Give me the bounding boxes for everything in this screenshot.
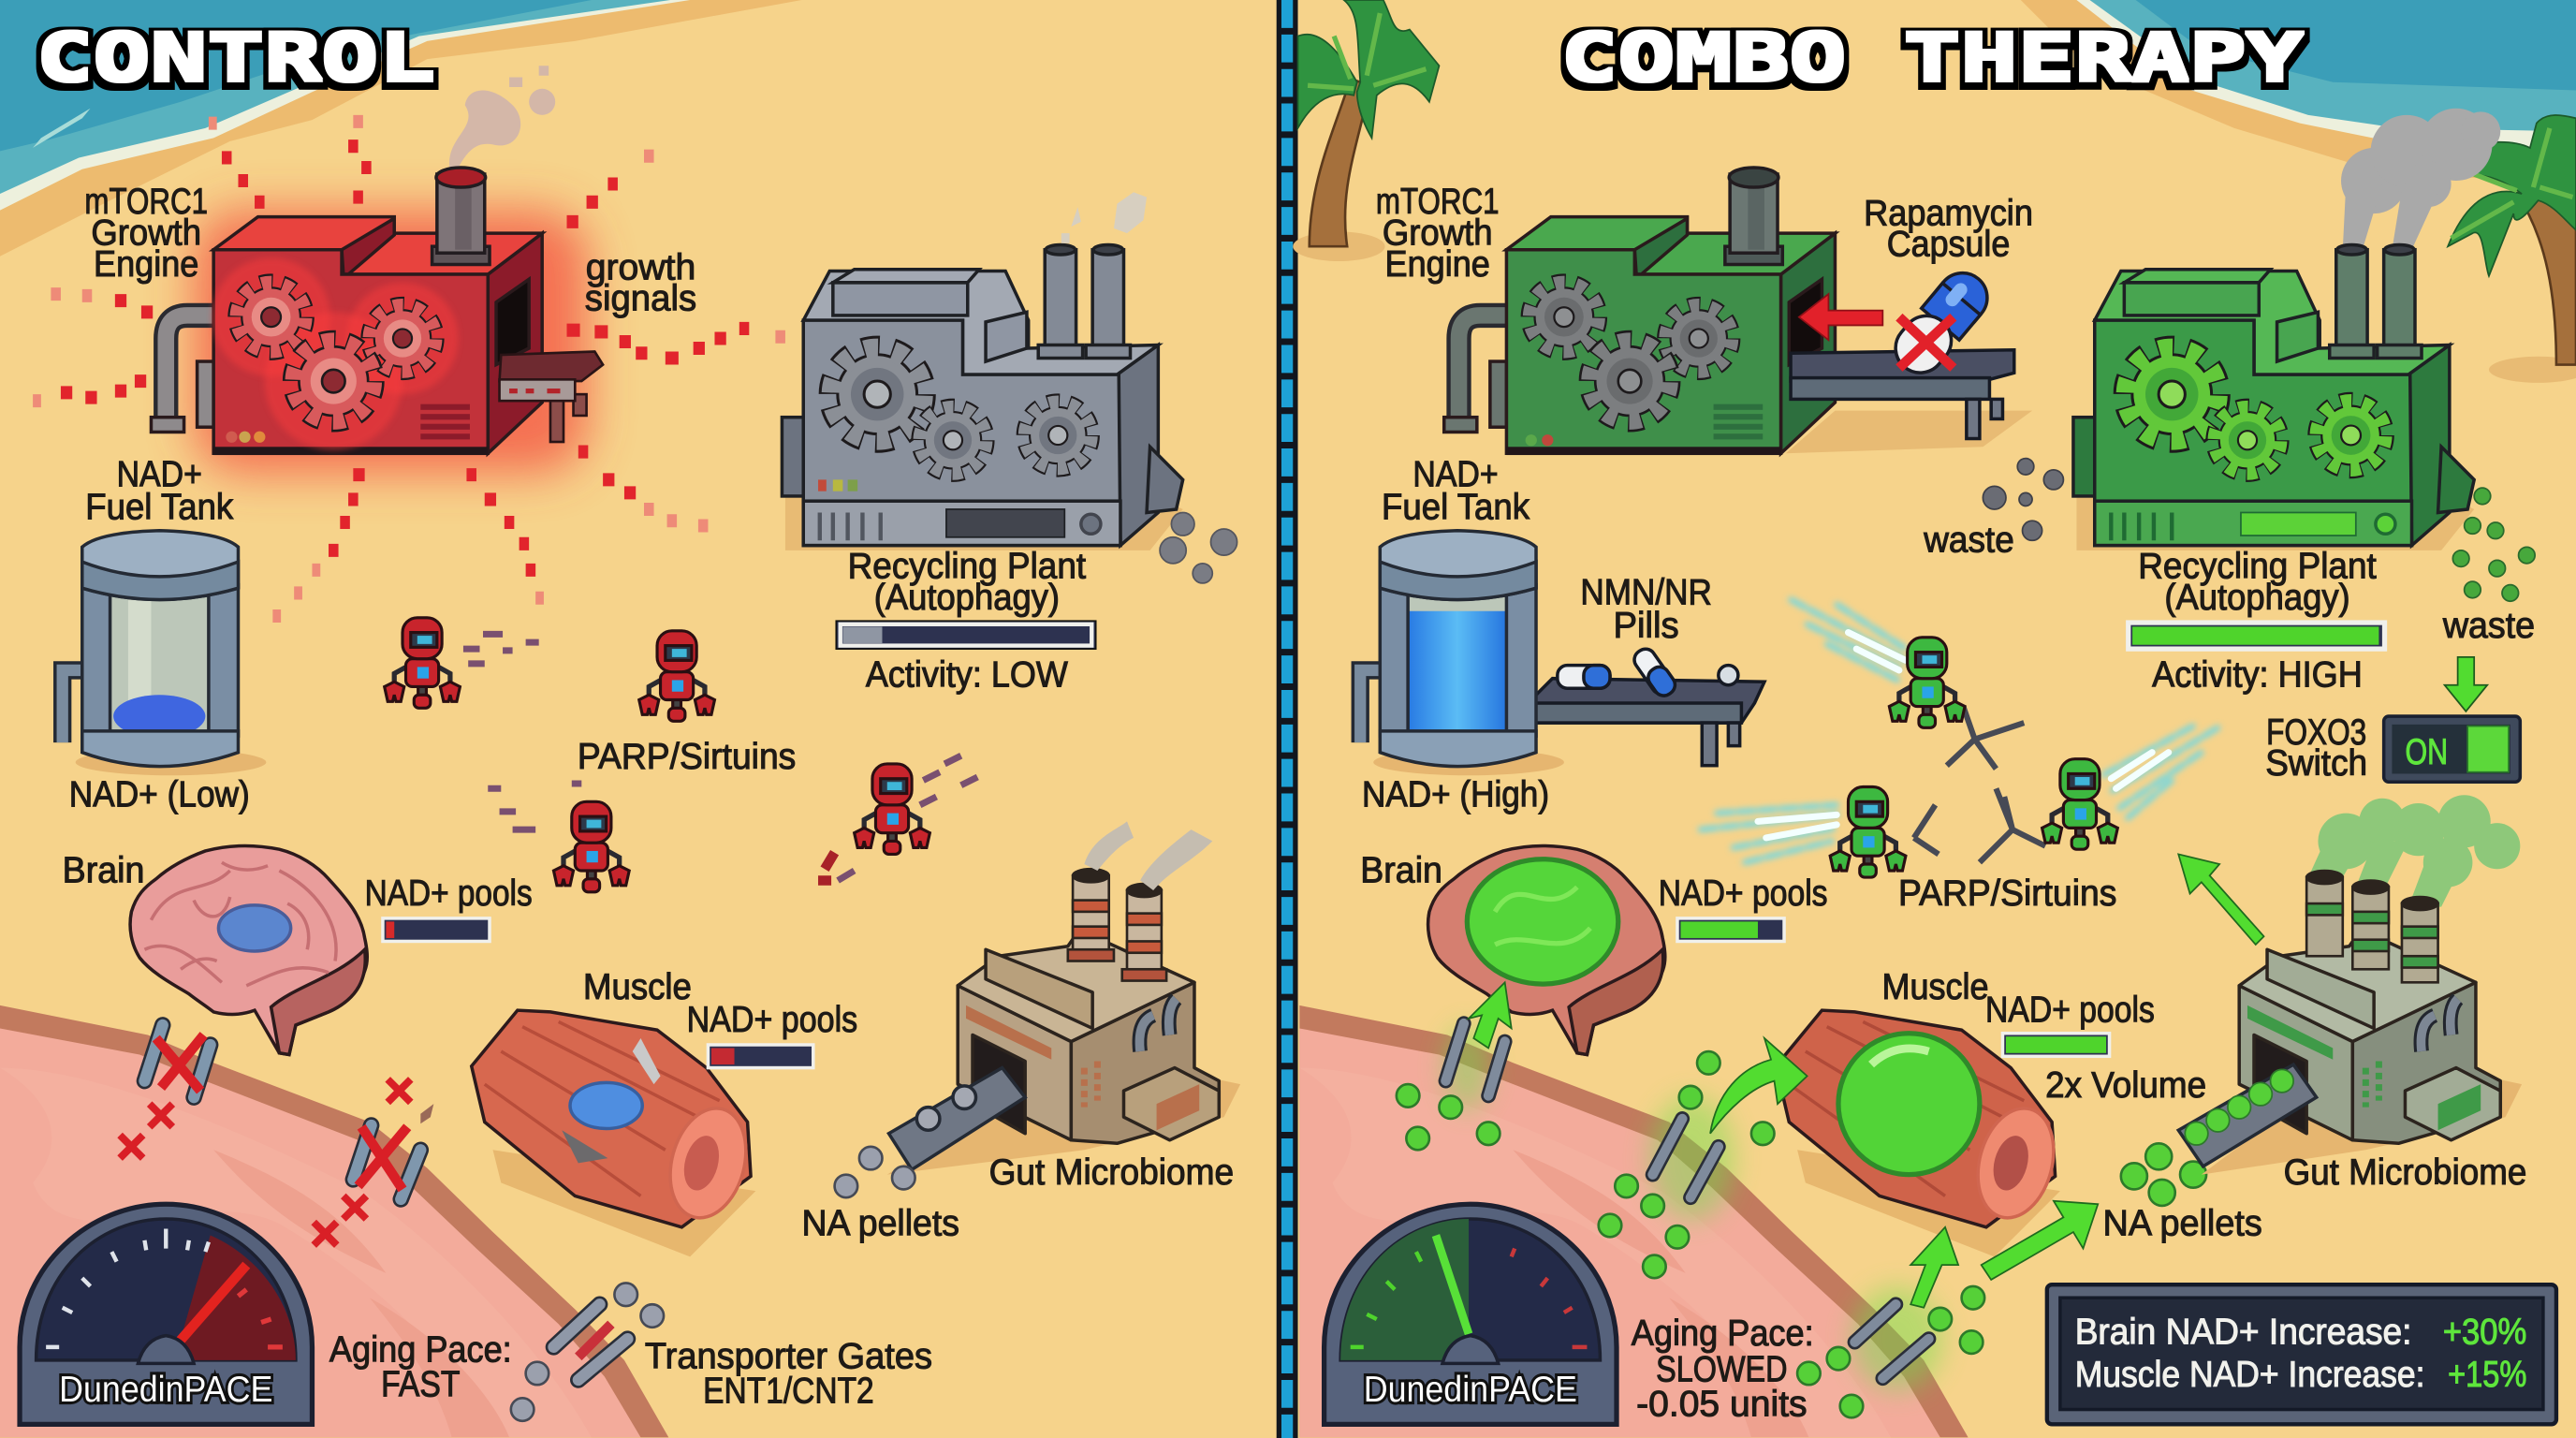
beach: shoreline and sea (2021, 0, 2576, 184)
bar: muscle pool high (2002, 1034, 2110, 1056)
label: mTORC1 growth engine (1376, 182, 1500, 285)
green glow at gates (1444, 1025, 1943, 1391)
skin tissue with vessel boundary (1299, 1005, 1969, 1437)
label: recycling plant: (Autophagy) (2164, 578, 2350, 618)
palm tree: left (1293, 0, 1439, 261)
conveyor: grey pellets (889, 1068, 1025, 1169)
cracked debris (1914, 707, 2045, 862)
chimneys: green striped (2306, 871, 2438, 982)
label: NAD+ pools muscle: NAD+ pools (1985, 990, 2155, 1030)
label: muscle: Muscle (1881, 967, 1989, 1007)
switch: ON (2384, 716, 2520, 782)
arrow: gate to muscle (1710, 1038, 1808, 1134)
chimney smoke: plant heavy grey (2341, 109, 2500, 250)
label: NAD+ pools muscle: NAD+ pools (687, 1000, 857, 1040)
label: mTORC1 growth engine: Engine (1385, 244, 1490, 285)
red x marks: blocked pellets (120, 1079, 411, 1245)
gauge label: DunedinPACE (59, 1370, 272, 1410)
label: rapamycin capsule (1864, 193, 2033, 265)
label: NAD+ fuel tank (1382, 454, 1530, 527)
conveyor: rapamycin belt (1791, 350, 2014, 439)
factory: gut microbiome (887, 821, 1240, 1175)
label: growth signals (585, 247, 696, 319)
label: aging pace slowed (1632, 1313, 1814, 1425)
label: activity high: Activity: HIGH (2152, 654, 2363, 695)
label: activity low: Activity: LOW (866, 654, 1068, 695)
label: NA pellets: NA pellets (801, 1204, 959, 1244)
activity bar: low (836, 621, 1096, 649)
label: rapamycin capsule: Capsule (1887, 225, 2010, 265)
label: NMN/NR pills: Pills (1614, 606, 1679, 646)
result: muscle: Muscle NAD+ Increase: (2075, 1355, 2425, 1395)
label: FOXO3 switch (2265, 712, 2367, 784)
label: gut microbiome: Gut Microbiome (989, 1152, 1234, 1193)
label: mTORC1 growth engine: mTORC1 (1376, 182, 1500, 222)
gauge: DunedinPACE fast (20, 1204, 312, 1424)
label: muscle: Muscle (583, 967, 692, 1007)
label: aging pace slowed: Aging Pace: (1632, 1313, 1814, 1354)
label: mTORC1 growth engine: Engine (94, 244, 198, 285)
display: green bars (2241, 512, 2395, 536)
result: brain: +30% (2443, 1312, 2526, 1352)
status lights (1526, 434, 1553, 446)
label: waste left: waste (1923, 521, 2014, 561)
label: waste right: waste (2442, 606, 2535, 646)
gears: idle grey (1530, 284, 1731, 420)
label: aging pace slowed: -0.05 units (1636, 1385, 1808, 1425)
label: mTORC1 growth engine (84, 182, 208, 285)
label: NMN/NR pills (1580, 573, 1712, 646)
label: PARP/Sirtuins: PARP/Sirtuins (1898, 873, 2116, 914)
smoke: factory (1084, 821, 1212, 890)
engine: mTORC1 calmed (1444, 168, 2032, 455)
label: NAD+ fuel tank (85, 454, 234, 527)
muscle: high NAD+ (1776, 1010, 2065, 1256)
label: FOXO3 switch: Switch (2265, 743, 2367, 784)
NAD precursor pellets: green (1397, 1051, 2206, 1417)
label: aging pace fast: Aging Pace: (329, 1330, 512, 1371)
label: NAD+ fuel tank: Fuel Tank (85, 487, 234, 527)
label: brain: Brain (63, 850, 144, 890)
glow around engine (194, 211, 588, 473)
brain: low NAD+ (130, 845, 367, 1055)
label: NAD+ high: NAD+ (High) (1362, 775, 1549, 815)
status lights (226, 432, 265, 443)
NA pellets: grey (835, 1147, 915, 1197)
recycling plant: idle grey (782, 244, 1183, 550)
pills (1558, 645, 1738, 699)
label: transporter gates (645, 1337, 932, 1412)
transporter gates: open (1445, 1023, 1928, 1378)
gears: glowing red (212, 257, 459, 450)
blocked transporter gate: brain (144, 1025, 211, 1097)
pellet fragment (420, 1104, 433, 1123)
label: recycling plant: Recycling Plant (848, 547, 1086, 587)
brain: high NAD+ (1428, 845, 1665, 1055)
transporter gate: bottom (511, 1283, 664, 1421)
blocked transporter gate: muscle (353, 1125, 420, 1199)
bar: brain pool high (1677, 918, 1784, 941)
beach: shoreline and sea (0, 0, 801, 257)
label: PARP/Sirtuins: PARP/Sirtuins (578, 737, 796, 777)
arrow: factory to sirtuins (2178, 854, 2264, 945)
panel: control (0, 0, 1240, 1437)
gauge: DunedinPACE slowed (1325, 1204, 1617, 1424)
tank: NAD+ high (1360, 531, 1564, 775)
arrow: down to switch (2445, 657, 2487, 712)
label: brain: Brain (1360, 850, 1442, 890)
waste particles: green (2452, 488, 2535, 601)
title: control: CONTROL (37, 20, 435, 96)
label: NAD+ low: NAD+ (Low) (69, 775, 250, 815)
label: transporter gates: ENT1/CNT2 (703, 1372, 874, 1412)
result: brain: Brain NAD+ Increase: (2075, 1312, 2411, 1352)
gears: dull (832, 349, 1090, 473)
chimney smoke: plant faint (1061, 192, 1147, 243)
label: NAD+ pools brain: NAD+ pools (365, 873, 533, 914)
recycling plant: active green (2073, 244, 2474, 550)
robots: PARP/Sirtuins struggling (385, 618, 977, 892)
label: mTORC1 growth engine: Growth (91, 213, 201, 253)
label: recycling plant (2138, 547, 2377, 618)
results panel (2047, 1284, 2556, 1424)
label: growth signals: signals (585, 279, 696, 319)
muscle: low NAD+ (472, 1010, 757, 1256)
arrow: blocked signal (1799, 294, 1882, 340)
bar: brain pool low (383, 918, 490, 941)
activity bar: high (2129, 623, 2385, 649)
result: muscle: +15% (2448, 1355, 2526, 1395)
divider (1277, 0, 1298, 1438)
label: growth signals: growth (586, 247, 695, 287)
conveyor: green pellets (2178, 1064, 2317, 1167)
bar: muscle pool low (708, 1045, 813, 1068)
title: combo therapy: COMBO THERAPY (1560, 20, 2304, 96)
label: recycling plant (848, 547, 1086, 618)
smoke: factory green (2310, 795, 2520, 907)
indicator lights and display (818, 479, 1101, 537)
conveyor: NMN/NR pills (1534, 645, 1764, 766)
label: NA pellets: NA pellets (2103, 1204, 2262, 1244)
chimneys: striped (1068, 869, 1166, 981)
waste particles: dark (1983, 459, 2063, 540)
robots: PARP/Sirtuins active (1830, 638, 2117, 877)
label: NMN/NR pills: NMN/NR (1580, 573, 1712, 613)
gears: bright green (2127, 349, 2384, 473)
arrow: gate to brain (1469, 982, 1512, 1049)
jets: robot speed trails (1701, 599, 2217, 862)
label: transporter gates: Transporter Gates (645, 1337, 932, 1377)
label: NAD+ fuel tank: NAD+ (1412, 454, 1499, 494)
conveyor: engine output (500, 352, 603, 442)
label: gut microbiome: Gut Microbiome (2284, 1152, 2526, 1193)
label: recycling plant: (Autophagy) (874, 578, 1060, 618)
waste pile: left (1160, 512, 1237, 583)
chimney smoke: engine (449, 66, 555, 170)
factory: gut microbiome active (2202, 871, 2522, 1175)
tank: NAD+ low (63, 531, 266, 775)
label: aging pace fast (329, 1330, 512, 1405)
label: 2x volume: 2x Volume (2045, 1065, 2206, 1106)
skin tissue with vessel boundary (0, 1005, 668, 1437)
label: NAD+ fuel tank: NAD+ (117, 454, 202, 494)
label: aging pace fast: FAST (381, 1365, 460, 1405)
label: mTORC1 growth engine: Growth (1383, 213, 1493, 253)
arrow: gate to muscle lower (1910, 1227, 1958, 1308)
label: recycling plant: Recycling Plant (2138, 547, 2377, 587)
label: aging pace slowed: SLOWED (1656, 1350, 1788, 1390)
palm tree: right (2435, 115, 2576, 383)
growth signal rays (33, 122, 785, 616)
arrow: pellets to tissue (1982, 1201, 2098, 1280)
label: mTORC1 growth engine: mTORC1 (84, 182, 208, 222)
engine: mTORC1 overactive (151, 168, 542, 455)
switch text: ON (2405, 732, 2448, 772)
label: NAD+ fuel tank: Fuel Tank (1382, 487, 1530, 527)
label: NAD+ pools brain: NAD+ pools (1659, 873, 1828, 914)
panel: combo therapy (1293, 0, 2576, 1437)
gauge label: DunedinPACE (1364, 1370, 1577, 1410)
capsule: rapamycin (1885, 263, 1998, 383)
label: rapamycin capsule: Rapamycin (1864, 193, 2033, 233)
red x: capsule inhibition (1899, 317, 1954, 368)
label: FOXO3 switch: FOXO3 (2266, 712, 2366, 753)
